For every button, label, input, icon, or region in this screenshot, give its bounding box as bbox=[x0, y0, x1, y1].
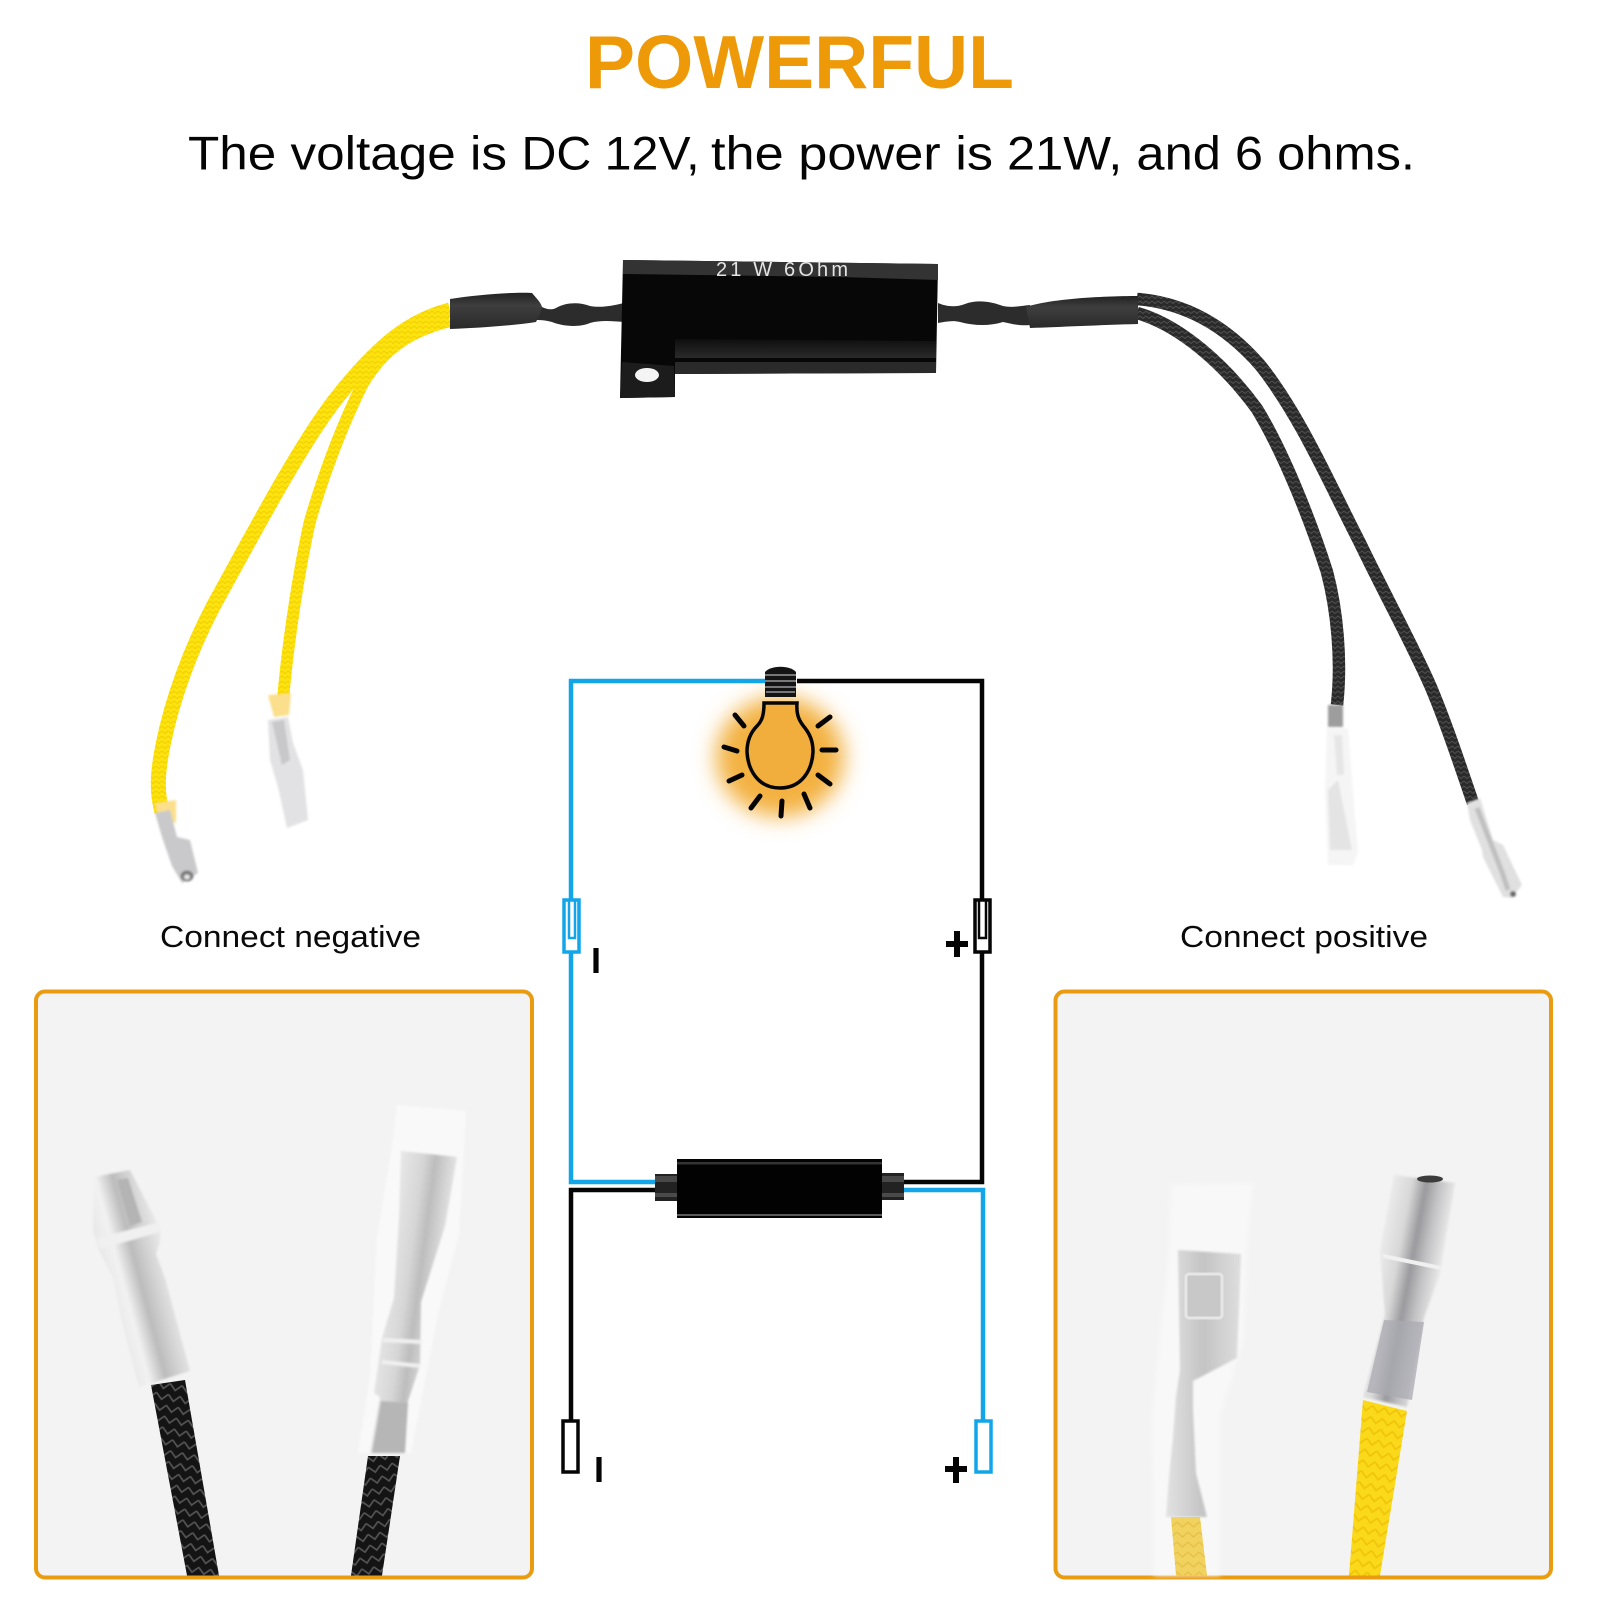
negative sign lower: I bbox=[594, 1449, 604, 1490]
socket terminal right bbox=[370, 1151, 457, 1453]
terminal: yellow right bbox=[268, 693, 308, 828]
black wire left bbox=[151, 1380, 219, 1576]
resistor marking: 21 W 6Ohm bbox=[716, 259, 848, 281]
circuit wire: black upper bbox=[797, 681, 982, 1182]
terminal: black right bbox=[1467, 798, 1522, 898]
label: connect negative: Connect negative bbox=[160, 919, 421, 954]
subtitle: the power is bbox=[711, 126, 993, 180]
circuit wire: blue lower bbox=[903, 1190, 983, 1421]
bulb glass bbox=[747, 703, 813, 788]
socket terminal left bbox=[1166, 1250, 1241, 1517]
bullet terminal left bbox=[93, 1170, 190, 1387]
resistor body bbox=[620, 259, 938, 398]
positive sign lower bbox=[945, 1457, 967, 1483]
bulb base bbox=[765, 667, 796, 697]
panel: positive connector close-up bbox=[1056, 992, 1551, 1578]
pale yellow wire bbox=[1171, 1517, 1207, 1576]
heat shrink: left bbox=[450, 293, 624, 329]
insulated sleeve right bbox=[358, 1105, 466, 1453]
panel frame bbox=[36, 992, 532, 1578]
positive sign upper bbox=[946, 931, 968, 957]
yellow wire right bbox=[1349, 1400, 1407, 1576]
terminal: yellow left bbox=[155, 800, 198, 883]
subtitle: 21W, and 6 ohms. bbox=[1007, 126, 1415, 180]
panel frame bbox=[1056, 992, 1551, 1578]
bulb bbox=[724, 667, 836, 816]
terminal: black left bbox=[1325, 705, 1358, 865]
clear sleeve left bbox=[1152, 1183, 1253, 1576]
black wire: short bbox=[1137, 313, 1339, 705]
circuit wire: blue upper bbox=[571, 681, 765, 1182]
subtitle bbox=[188, 126, 1415, 180]
panel: negative connector close-up bbox=[36, 992, 532, 1578]
resistor symbol bbox=[655, 1159, 904, 1218]
terminal symbol: blue top bbox=[564, 900, 579, 952]
yellow wire: short bbox=[283, 321, 450, 700]
bullet terminal right bbox=[1363, 1175, 1455, 1407]
black wire: long bbox=[1137, 299, 1473, 803]
title: POWERFUL bbox=[585, 20, 1014, 104]
circuit wire: black lower bbox=[571, 1190, 656, 1421]
mounting hole bbox=[635, 368, 659, 382]
terminal symbol: black top bbox=[975, 900, 990, 952]
label: connect positive: Connect positive bbox=[1180, 919, 1428, 954]
yellow wire: long bbox=[158, 310, 450, 812]
terminal symbol: blue bottom bbox=[976, 1421, 991, 1472]
terminal symbol: black bottom bbox=[563, 1421, 578, 1472]
subtitle: The voltage is bbox=[188, 126, 507, 180]
circuit diagram bbox=[563, 667, 991, 1490]
product photo: load resistor with wires bbox=[155, 259, 1522, 898]
heat shrink: right bbox=[938, 296, 1138, 328]
bulb glow bbox=[716, 697, 844, 817]
subtitle: DC 12V, bbox=[522, 126, 700, 180]
negative sign upper: I bbox=[591, 940, 601, 981]
black wire right bbox=[351, 1456, 400, 1576]
light rays bbox=[724, 715, 836, 816]
